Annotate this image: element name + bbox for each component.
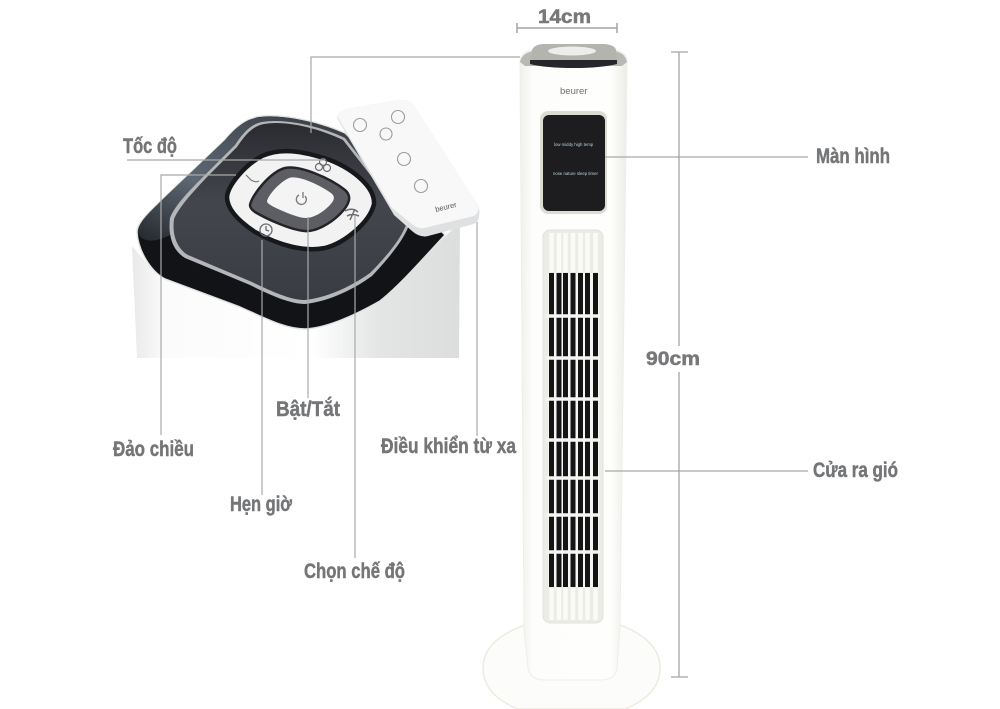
remote button: mode bbox=[380, 128, 392, 140]
fan column bbox=[520, 50, 627, 680]
vent opening bbox=[548, 273, 599, 587]
label: outlet: Cửa ra gió bbox=[813, 459, 898, 482]
height dimension: 90cm: 90cm bbox=[646, 349, 700, 370]
remote button: power bbox=[392, 110, 404, 124]
remote button: reverse bbox=[414, 180, 428, 192]
timer icon bbox=[260, 224, 272, 236]
remote button: speed bbox=[354, 118, 366, 132]
line: speed bbox=[127, 159, 325, 161]
tower fan bbox=[483, 44, 660, 709]
label: timer: Hẹn giờ bbox=[230, 493, 292, 516]
label: speed: Tốc độ bbox=[123, 135, 177, 158]
display labels row 1: low middy high temp bbox=[554, 142, 594, 147]
reverse icon bbox=[246, 175, 259, 182]
line: top panel bbox=[311, 57, 520, 133]
label: display: Màn hình bbox=[816, 145, 890, 168]
power icon bbox=[296, 192, 306, 204]
label: power: Bật/Tắt bbox=[276, 397, 340, 421]
fan top cap bbox=[520, 44, 627, 68]
line: timer bbox=[261, 240, 263, 495]
width dimension: 14cm bbox=[517, 7, 617, 33]
vent slots bbox=[552, 273, 596, 587]
label: reverse: Đảo chiều bbox=[113, 438, 194, 461]
label: mode: Chọn chế độ bbox=[304, 560, 405, 583]
upper rim bbox=[138, 117, 400, 241]
power button dark surround bbox=[250, 168, 349, 231]
mode icon bbox=[345, 209, 359, 220]
leader lines bbox=[127, 57, 808, 558]
line: mode bbox=[354, 215, 356, 558]
height dimension: 90cm bbox=[644, 52, 704, 677]
label: remote: Điều khiển từ xa bbox=[381, 435, 516, 458]
remote button: timer bbox=[398, 152, 410, 166]
line: power bbox=[307, 217, 309, 398]
display panel bbox=[540, 111, 607, 214]
width dimension: 14cm: 14cm bbox=[538, 7, 591, 28]
dark plate bbox=[174, 123, 407, 300]
product close-up: control panel bbox=[132, 116, 460, 358]
button ring bbox=[227, 151, 374, 249]
outer black bezel bbox=[137, 116, 445, 329]
remote control bbox=[337, 100, 480, 236]
brand: beurer bbox=[560, 86, 587, 97]
grille horizontal bars bbox=[546, 316, 600, 552]
fan base bbox=[483, 625, 660, 709]
line: reverse bbox=[161, 175, 236, 435]
power button bbox=[267, 177, 334, 218]
speed icon bbox=[316, 158, 330, 172]
air outlet grille bbox=[543, 230, 603, 623]
grille top slots bbox=[552, 233, 596, 620]
line: display bbox=[605, 156, 808, 158]
line: outlet bbox=[605, 470, 808, 472]
remote brand: beurer bbox=[434, 200, 458, 214]
display labels row 2: nose nature sleep timer bbox=[553, 171, 598, 176]
silver ring bbox=[170, 121, 410, 304]
line: remote bbox=[476, 222, 478, 436]
unit body bbox=[132, 222, 460, 358]
